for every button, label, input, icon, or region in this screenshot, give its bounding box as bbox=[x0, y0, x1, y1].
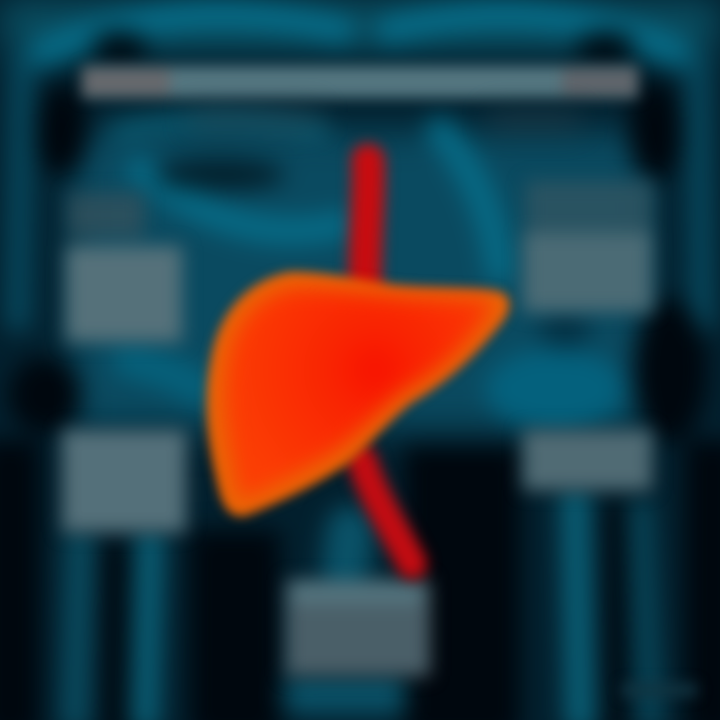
liver bbox=[207, 272, 509, 516]
watermark (illegible in reference) bbox=[622, 684, 697, 696]
panel: upper left text bbox=[66, 193, 182, 342]
liver outer glow bbox=[207, 272, 509, 516]
liver body bbox=[225, 288, 496, 500]
panel: bottom centre text bbox=[286, 580, 430, 676]
panel: upper right text bbox=[523, 181, 652, 312]
lower vessel bbox=[362, 460, 412, 564]
upper vessel bbox=[365, 160, 368, 292]
panel: lower right text bbox=[523, 430, 652, 490]
subtitle block (illegible in reference) bbox=[190, 108, 580, 130]
title block (illegible in reference) bbox=[82, 66, 638, 98]
panel: lower left text bbox=[62, 430, 186, 532]
